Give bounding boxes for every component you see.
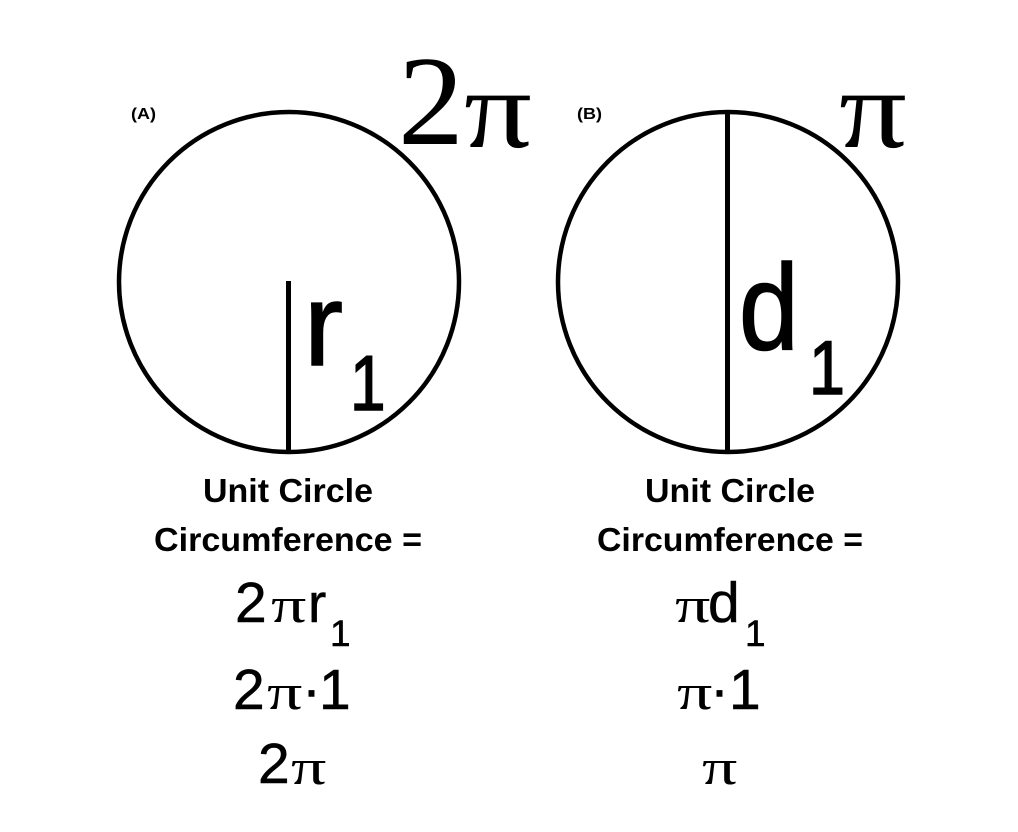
equation lines B: π	[702, 740, 737, 796]
equation lines A: 2	[258, 732, 290, 796]
heading A: Unit Circle	[203, 472, 373, 509]
equation lines A: 1	[330, 613, 351, 654]
equation lines A: 2	[233, 658, 265, 722]
circle outline B	[558, 112, 898, 452]
equation lines B: π	[675, 578, 710, 634]
equation lines B: d	[708, 571, 740, 635]
diameter label: d	[739, 240, 799, 376]
equation lines B: ·	[710, 658, 729, 722]
diameter label: 1	[809, 325, 845, 410]
panel: circle B	[558, 47, 907, 452]
big pi value: π	[839, 47, 907, 171]
radius label: r	[304, 259, 343, 390]
radius line	[286, 281, 291, 452]
equation lines A: π	[267, 665, 302, 721]
big 2 pi value: 2	[398, 31, 464, 173]
equation lines A: π	[291, 740, 326, 796]
diameter line	[725, 112, 730, 452]
panel: circle A	[119, 31, 532, 452]
heading A	[154, 472, 422, 558]
equation lines A: 1	[319, 658, 351, 722]
diameter label	[739, 240, 845, 410]
heading B	[597, 472, 863, 558]
equation lines A: ·	[302, 658, 321, 722]
label B: (B)	[577, 106, 602, 123]
equation lines B: π	[677, 665, 712, 721]
radius label: 1	[350, 340, 386, 427]
heading B: Circumference =	[597, 521, 863, 558]
heading B: Unit Circle	[645, 472, 815, 509]
heading A: Circumference =	[154, 521, 422, 558]
big 2 pi value: π	[464, 47, 532, 171]
equation lines B: 1	[745, 613, 766, 654]
big 2 pi value	[398, 31, 532, 173]
circle outline A	[119, 112, 459, 452]
text block: formula A	[154, 472, 422, 796]
text block: formula B	[597, 472, 863, 796]
radius label	[304, 259, 386, 427]
equation lines A: π	[271, 578, 306, 634]
equation lines B	[675, 571, 766, 796]
equation lines A: 2	[235, 571, 267, 635]
equation lines A: r	[308, 572, 326, 634]
label A: (A)	[131, 106, 156, 123]
equation lines A	[233, 571, 351, 796]
equation lines B: 1	[729, 658, 761, 722]
